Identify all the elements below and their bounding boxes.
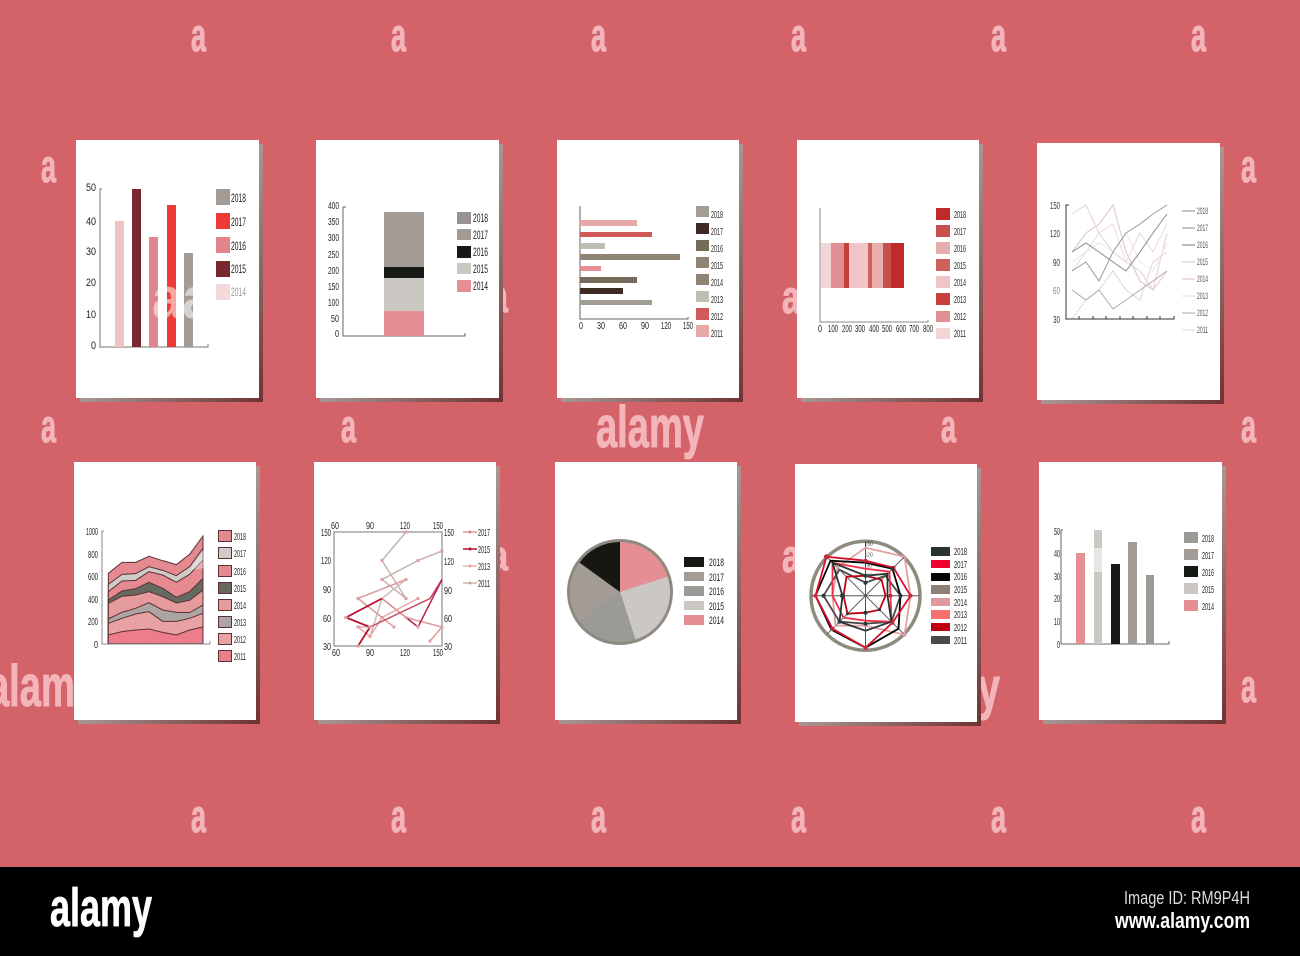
footer logo: alamy xyxy=(50,878,152,938)
legend: 2017 xyxy=(231,215,246,229)
panel: stacked column xyxy=(316,140,503,402)
legend: 2014 xyxy=(954,598,967,609)
stacked area chart: 600 xyxy=(88,572,98,583)
legend: 2018 xyxy=(954,547,967,558)
legend: 2018 xyxy=(954,210,966,221)
watermark pattern: a xyxy=(391,790,406,842)
legend: 2011 xyxy=(954,636,967,647)
column chart xyxy=(1054,527,1169,651)
column chart: 10 xyxy=(1054,617,1060,628)
legend xyxy=(463,528,490,590)
connected scatter chart: 150 xyxy=(444,528,454,539)
multi-line chart xyxy=(1050,201,1174,326)
connected scatter chart: 60 xyxy=(331,521,339,532)
watermark pattern: a xyxy=(991,9,1006,61)
footer bar xyxy=(0,867,1300,956)
stacked horizontal bar: 500 xyxy=(882,324,892,335)
watermark pattern: alamy xyxy=(596,395,704,460)
legend: 2013 xyxy=(711,295,723,306)
legend: 2017 xyxy=(709,572,724,584)
legend: 2018 xyxy=(709,557,724,569)
legend: 2015 xyxy=(1197,257,1208,267)
legend: 2015 xyxy=(478,545,490,556)
stacked area chart xyxy=(86,527,210,651)
radar chart: 150 xyxy=(864,542,873,548)
horizontal bar chart: 90 xyxy=(641,321,649,332)
watermark pattern: a xyxy=(591,790,606,842)
site url: www.alamy.com xyxy=(1114,908,1250,933)
multi-line chart: 120 xyxy=(1050,229,1060,240)
panel: column chart grey xyxy=(1039,462,1226,724)
legend xyxy=(684,557,724,627)
connected scatter chart: 60 xyxy=(444,614,452,625)
connected scatter chart: 120 xyxy=(400,521,410,532)
stacked column chart: 200 xyxy=(328,266,339,277)
connected scatter chart: 60 xyxy=(332,648,340,659)
legend: 2015 xyxy=(954,585,967,596)
watermark pattern: a xyxy=(341,400,356,452)
legend: 2014 xyxy=(234,601,246,612)
stacked area chart: 1000 xyxy=(86,527,98,538)
connected scatter chart: 90 xyxy=(366,521,374,532)
legend: 2013 xyxy=(478,562,490,573)
legend xyxy=(1184,532,1214,613)
legend: 2018 xyxy=(1202,534,1214,545)
legend: 2016 xyxy=(709,586,724,598)
panel: scatter lines xyxy=(314,462,500,724)
column chart xyxy=(86,182,208,352)
legend: 2011 xyxy=(954,329,966,340)
radar chart xyxy=(811,541,920,650)
stacked column chart: 0 xyxy=(335,329,339,340)
stacked area chart: 200 xyxy=(88,617,98,628)
legend: 2017 xyxy=(1202,551,1214,562)
connected scatter chart: 150 xyxy=(433,648,443,659)
legend: 2012 xyxy=(234,635,246,646)
stacked area chart: 800 xyxy=(88,550,98,561)
stacked horizontal bar: 200 xyxy=(842,324,852,335)
watermark pattern: a xyxy=(782,271,800,323)
legend xyxy=(696,206,723,340)
legend: 2012 xyxy=(711,312,723,323)
panel: pie xyxy=(555,462,741,724)
connected scatter chart: 30 xyxy=(444,642,452,653)
legend: 2018 xyxy=(234,532,246,543)
watermark pattern: a xyxy=(1241,140,1256,192)
column chart: 40 xyxy=(86,216,96,228)
legend: 2013 xyxy=(1197,291,1208,301)
legend xyxy=(936,208,966,340)
panel: stacked area xyxy=(74,462,260,724)
column chart: 40 xyxy=(1054,549,1060,560)
multi-line chart: 150 xyxy=(1050,201,1060,212)
connected scatter chart: 120 xyxy=(321,556,331,567)
legend: 2016 xyxy=(473,245,488,259)
stacked column chart: 50 xyxy=(331,314,339,325)
radar chart: 90 xyxy=(866,564,872,570)
watermark pattern: a xyxy=(1191,790,1206,842)
legend: 2018 xyxy=(473,211,488,225)
stacked horizontal bar: 0 xyxy=(818,324,822,335)
column chart: 30 xyxy=(86,246,96,258)
legend: 2017 xyxy=(954,560,967,571)
stacked column chart: 250 xyxy=(328,250,339,261)
stacked horizontal bar: 700 xyxy=(909,324,919,335)
legend: 2014 xyxy=(473,279,488,293)
connected scatter chart xyxy=(321,521,454,659)
watermark pattern: a xyxy=(791,9,806,61)
legend: 2015 xyxy=(954,261,966,272)
pie chart xyxy=(567,539,673,645)
legend: 2016 xyxy=(954,572,967,583)
column chart: 50 xyxy=(1054,527,1060,538)
legend: 2012 xyxy=(1197,308,1208,318)
legend: 2012 xyxy=(954,312,966,323)
image id: Image ID: RM9P4H xyxy=(1124,888,1250,908)
stacked area chart: 400 xyxy=(88,595,98,606)
connected scatter chart: 120 xyxy=(444,557,454,568)
legend: 2012 xyxy=(954,623,967,634)
watermark pattern: a xyxy=(191,790,206,842)
legend: 2016 xyxy=(1197,240,1208,250)
watermark pattern: a xyxy=(591,9,606,61)
panel: radar xyxy=(795,464,981,726)
connected scatter chart: 60 xyxy=(323,614,331,625)
connected scatter chart: 150 xyxy=(433,521,443,532)
watermark pattern: a xyxy=(41,400,56,452)
watermark pattern: a xyxy=(1191,9,1206,61)
legend: 2014 xyxy=(954,278,966,289)
multi-line chart: 60 xyxy=(1053,286,1060,297)
connected scatter chart: 90 xyxy=(323,585,331,596)
stacked column chart: 150 xyxy=(328,282,339,293)
legend: 2017 xyxy=(954,227,966,238)
legend: 2011 xyxy=(711,329,723,340)
stacked horizontal bar: 400 xyxy=(869,324,879,335)
horizontal bar chart: 30 xyxy=(597,321,605,332)
column chart: 50 xyxy=(86,182,96,194)
column chart: 0 xyxy=(91,340,96,352)
stacked area chart: 0 xyxy=(94,640,98,651)
watermark pattern: a xyxy=(191,9,206,61)
stacked horizontal bar: 600 xyxy=(896,324,906,335)
legend: 2015 xyxy=(234,584,246,595)
stacked horizontal bar: 800 xyxy=(923,324,933,335)
stacked column chart: 400 xyxy=(328,201,339,212)
connected scatter chart: 120 xyxy=(400,648,410,659)
legend: 2011 xyxy=(234,652,246,663)
legend: 2016 xyxy=(231,239,246,253)
legend: 2015 xyxy=(709,601,724,613)
horizontal bar chart xyxy=(579,206,693,332)
stacked horizontal bar xyxy=(818,208,933,335)
legend: 2018 xyxy=(1197,206,1208,216)
legend: 2013 xyxy=(954,610,967,621)
panel: column chart red xyxy=(76,140,263,402)
stacked column chart: 350 xyxy=(328,217,339,228)
legend: 2017 xyxy=(234,549,246,560)
legend: 2014 xyxy=(709,615,724,627)
connected scatter chart: 90 xyxy=(444,586,452,597)
legend: 2015 xyxy=(711,261,723,272)
legend: 2013 xyxy=(234,618,246,629)
legend: 2017 xyxy=(473,228,488,242)
watermark pattern: a xyxy=(782,530,800,582)
watermark pattern: a xyxy=(490,532,508,579)
horizontal bar chart: 150 xyxy=(683,321,693,332)
legend: 2016 xyxy=(234,567,246,578)
legend: 2013 xyxy=(954,295,966,306)
legend: 2016 xyxy=(954,244,966,255)
legend xyxy=(931,547,967,647)
legend: 2015 xyxy=(473,262,488,276)
legend: 2014 xyxy=(711,278,723,289)
legend: 2016 xyxy=(711,244,723,255)
radar chart: 60 xyxy=(866,574,872,580)
legend: 2015 xyxy=(1202,585,1214,596)
column chart: 30 xyxy=(1054,572,1060,583)
horizontal bar chart: 120 xyxy=(661,321,671,332)
legend xyxy=(216,189,246,300)
panel: line chart xyxy=(1037,143,1224,404)
legend: 2016 xyxy=(1202,568,1214,579)
legend: 2011 xyxy=(1197,325,1208,335)
legend: 2017 xyxy=(478,528,490,539)
legend: 2011 xyxy=(478,579,490,590)
radar chart: 120 xyxy=(864,553,873,559)
legend xyxy=(457,211,488,293)
watermark pattern: a xyxy=(41,140,56,192)
stacked column chart: 300 xyxy=(328,233,339,244)
connected scatter chart: 90 xyxy=(366,648,374,659)
multi-line chart: 90 xyxy=(1053,258,1060,269)
legend: 2018 xyxy=(231,191,246,205)
stacked horizontal bar: 100 xyxy=(828,324,838,335)
horizontal bar chart: 0 xyxy=(579,321,583,332)
watermark pattern: a xyxy=(1241,400,1256,452)
connected scatter chart: 150 xyxy=(321,528,331,539)
legend: 2017 xyxy=(1197,223,1208,233)
watermark pattern: y xyxy=(978,656,1000,721)
column chart: 0 xyxy=(1057,640,1060,651)
column chart: 20 xyxy=(1054,594,1060,605)
legend: 2014 xyxy=(231,285,246,299)
watermark pattern: a xyxy=(490,270,508,322)
panel: single stacked bar xyxy=(797,140,983,402)
horizontal bar chart: 60 xyxy=(619,321,627,332)
legend xyxy=(218,530,246,663)
watermark over chart: aa xyxy=(152,266,213,331)
multi-line chart: 30 xyxy=(1053,315,1060,326)
legend: 2018 xyxy=(711,210,723,221)
connected scatter chart: 30 xyxy=(323,642,331,653)
watermark pattern: a xyxy=(791,790,806,842)
legend: 2014 xyxy=(1202,602,1214,613)
watermark pattern: a xyxy=(991,790,1006,842)
watermark pattern: a xyxy=(941,400,956,452)
legend xyxy=(1182,206,1208,335)
legend: 2017 xyxy=(711,227,723,238)
legend: 2015 xyxy=(231,262,246,276)
column chart: 20 xyxy=(86,277,96,289)
panel: horizontal bars xyxy=(557,140,743,402)
legend: 2014 xyxy=(1197,274,1208,284)
watermark pattern: a xyxy=(391,9,406,61)
stacked horizontal bar: 300 xyxy=(855,324,865,335)
stacked column chart xyxy=(328,201,465,340)
watermark pattern: a xyxy=(1241,660,1256,712)
column chart: 10 xyxy=(86,309,96,321)
stacked column chart: 100 xyxy=(328,298,339,309)
